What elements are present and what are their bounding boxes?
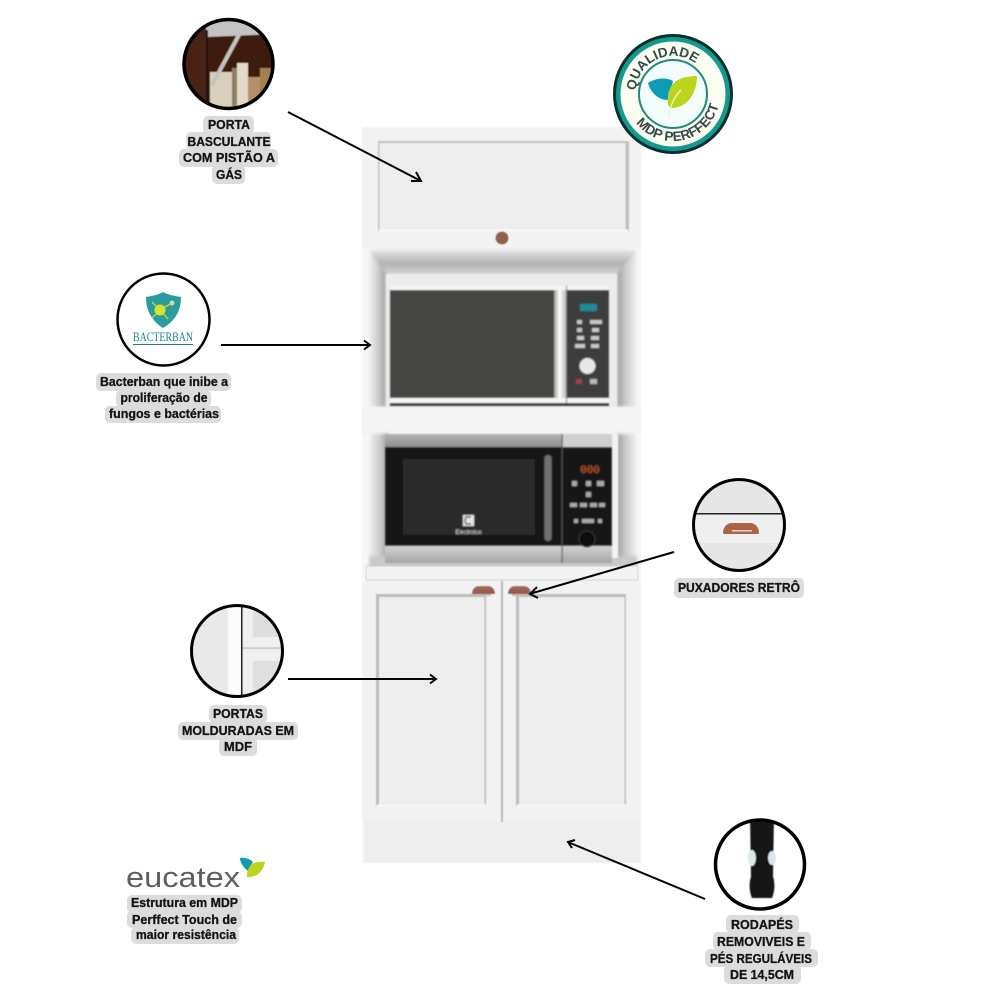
lower niche with microwave — [362, 434, 641, 582]
label text: PORTA — [208, 118, 250, 132]
icon: leaves — [648, 76, 697, 117]
callout: eucatex — [126, 858, 265, 944]
upper niche with microwave — [362, 248, 641, 408]
counter — [366, 566, 638, 580]
handle — [472, 586, 495, 596]
handle — [508, 586, 531, 596]
callout: puxadores retro — [674, 478, 804, 598]
label text — [178, 705, 298, 756]
callout: porta basculante — [179, 15, 278, 184]
arrow: plinth — [568, 840, 705, 899]
shelf — [362, 407, 641, 434]
badge: qualidade MDP Perffect — [613, 34, 733, 154]
label text: COM PISTÃO A — [183, 150, 275, 165]
photo circle: adjustable foot — [715, 815, 805, 910]
arrow: top door — [288, 112, 421, 181]
callout: bacterban — [96, 274, 231, 423]
right lower door — [503, 581, 641, 822]
door knob — [496, 232, 508, 244]
left lower door — [362, 581, 502, 822]
label text: PUXADORES RETRÔ — [678, 580, 800, 595]
microwave: upper — [390, 286, 609, 406]
microwave: Electrolux: 000 — [580, 465, 600, 477]
photo circle: moulded door — [190, 604, 284, 698]
badge: qualidade MDP Perffect: QUALIDADE — [627, 46, 700, 90]
arrow: moulded doors — [288, 674, 436, 684]
microwave: Electrolux — [385, 434, 612, 563]
photo circle: handle — [692, 478, 786, 572]
label text: fungos e bactérias — [109, 407, 219, 421]
logo — [455, 515, 482, 536]
label text: BASCULANTE — [188, 135, 270, 149]
logo circle: bacterban: BACTERBAN — [133, 330, 193, 344]
label text: GÁS — [216, 167, 242, 182]
label text: Bacterban que inibe a — [100, 375, 229, 389]
label text: DE 14,5CM — [730, 968, 794, 982]
label text — [179, 116, 278, 184]
label text: Perffect Touch de — [132, 913, 237, 927]
arrow: bacterban — [221, 340, 370, 350]
callout: portas molduradas — [178, 601, 298, 756]
label text: MDF — [224, 740, 252, 754]
label text: Estrutura em MDP — [131, 896, 238, 910]
cabinet top door — [362, 127, 641, 248]
photo circle: gas piston — [180, 15, 278, 113]
logo: Electrolux — [455, 530, 482, 536]
label text — [705, 915, 818, 984]
plinth — [363, 822, 641, 863]
label text: REMOVIVEIS E — [717, 935, 805, 949]
label text: proliferação de — [120, 391, 208, 405]
logo: eucatex: eucatex — [126, 862, 241, 894]
label text: PORTAS — [213, 707, 263, 721]
badge: qualidade MDP Perffect: MDP PERFFECT — [636, 102, 718, 142]
label text: maior resistência — [136, 928, 237, 942]
cabinet — [362, 127, 641, 863]
label text — [127, 895, 242, 944]
callout: rodapes — [705, 815, 818, 984]
label text — [96, 373, 231, 423]
arrow: handles — [530, 552, 674, 598]
label text: RODAPÉS — [731, 917, 793, 932]
label text: MOLDURADAS EM — [182, 724, 294, 738]
label text: PÉS REGULÁVEIS — [710, 951, 812, 966]
logo circle: bacterban — [118, 274, 210, 366]
